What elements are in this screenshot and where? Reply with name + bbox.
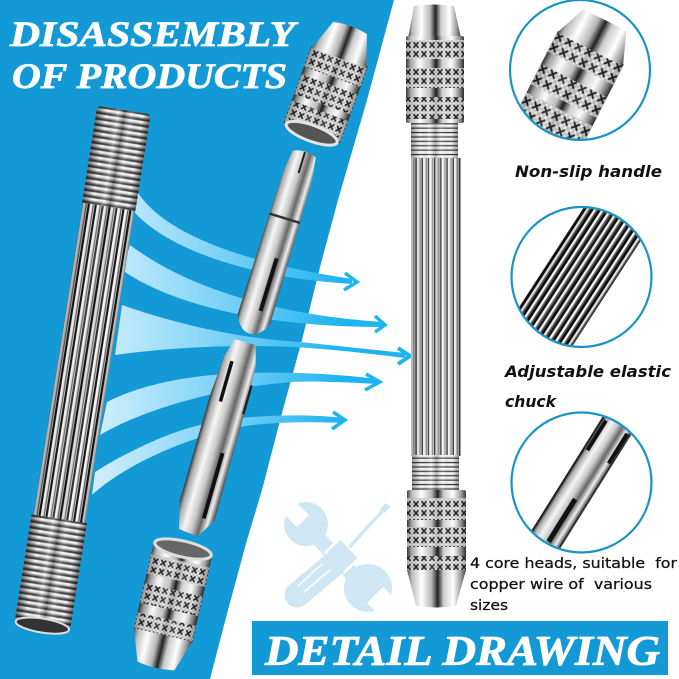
heading: disassembly of products: [9, 14, 298, 96]
top cone: [408, 4, 461, 38]
arrow 5: [92, 412, 345, 495]
top knurled handle: [406, 36, 464, 123]
banner: detail drawing: DETAIL DRAWING: [264, 629, 660, 675]
label: core heads description: 4 core heads, suitable for: [470, 556, 677, 572]
arrow 2: [122, 245, 385, 332]
label: adjustable elastic chuck: [503, 362, 672, 411]
knurl bands: [134, 554, 210, 643]
label: core heads description: [470, 556, 677, 614]
label: adjustable elastic chuck: Adjustable elastic: [503, 362, 672, 381]
icon: crossed wrench and screwdriver: [272, 490, 413, 633]
screwdriver: [297, 505, 388, 595]
arrows: five curved arrows from rod to assembled tool: [92, 193, 410, 495]
opening: [153, 535, 213, 563]
cap body: [284, 46, 368, 144]
lower slot: [202, 453, 224, 519]
upper thread: [82, 106, 151, 213]
slot: [259, 258, 279, 312]
label: core heads description: copper wire of various: [470, 577, 652, 593]
groove: [269, 212, 300, 224]
product part: lower knurled cap: [126, 534, 214, 675]
arrow 1: [135, 193, 357, 290]
lower knurled handle: [407, 490, 466, 571]
knurl bands: [284, 48, 367, 142]
product part: lower chuck pin: [172, 337, 264, 540]
top thread: [411, 123, 458, 159]
panel: blue curved background: [0, 0, 394, 679]
ribbed shaft: [33, 203, 134, 525]
right slot: [242, 385, 253, 415]
label: core heads description: sizes: [470, 598, 508, 614]
product part: upper knurled cap: [281, 16, 379, 151]
product part: threaded ribbed rod: [14, 106, 152, 637]
detail circle: chuck slots: [510, 411, 653, 554]
cap opening: [284, 116, 340, 150]
cap body: [134, 542, 212, 641]
bottom cone: [407, 570, 466, 608]
lower thread: [15, 515, 87, 630]
upper slot: [219, 361, 234, 402]
product part: upper chuck pin: [233, 147, 321, 339]
ribbed shaft: [411, 158, 461, 456]
label: adjustable elastic chuck: chuck: [505, 392, 557, 411]
wrench: [272, 490, 413, 633]
label: non-slip handle: Non-slip handle: [515, 162, 662, 181]
tip split: [298, 152, 306, 173]
arrow 4: [100, 373, 380, 435]
arrow 3: [115, 305, 410, 364]
detail circle: ribbed shaft: [510, 206, 653, 348]
heading: disassembly of products: DISASSEMBLY: [9, 14, 298, 54]
cone: [312, 16, 378, 68]
detail circle: knurled handle: [508, 0, 652, 142]
lower thread: [412, 455, 459, 491]
rod end: [15, 614, 70, 637]
product: assembled pin vise: [406, 4, 466, 608]
heading: disassembly of products: OF PRODUCTS: [12, 56, 287, 96]
cone: [126, 628, 192, 675]
